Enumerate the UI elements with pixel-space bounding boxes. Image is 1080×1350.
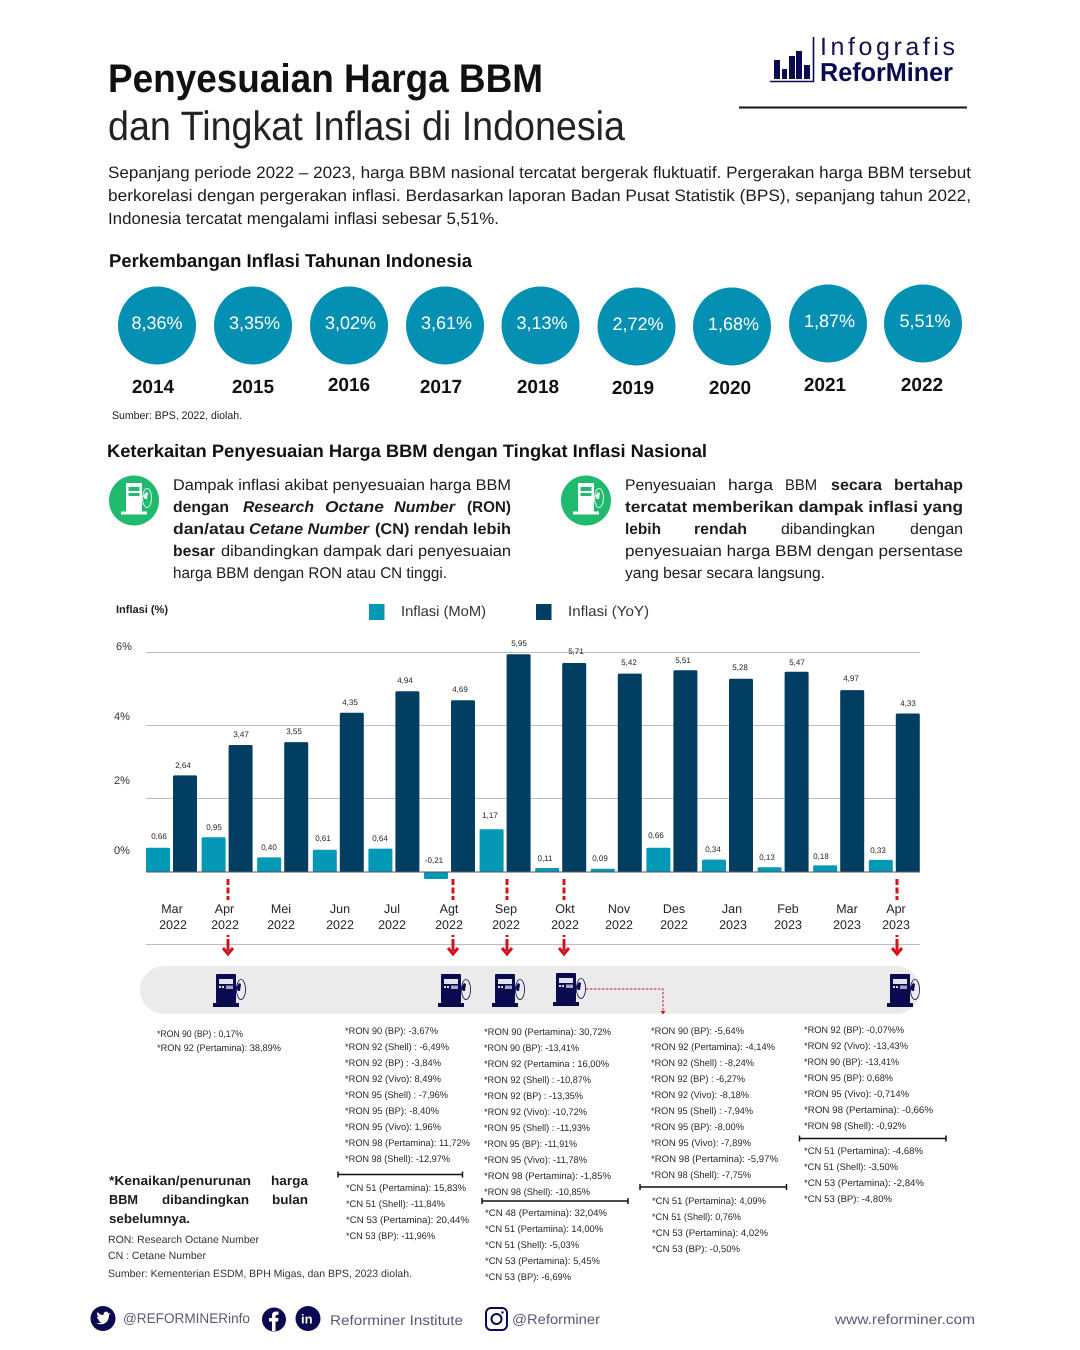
- price list: Apr 2022: [157, 1029, 282, 1054]
- price list: Okt 2022: *CN 51 (Shell): 0,76%: [652, 1212, 742, 1223]
- footnote: price change note: *Kenaikan/penurunan: [109, 1173, 251, 1188]
- value labels: 0,33: [870, 846, 886, 855]
- footer: facebook: [262, 1308, 286, 1332]
- y axis labels: 0%: [114, 845, 130, 857]
- text block: left explanation: besar: [173, 543, 215, 560]
- price list: Apr 2023: *RON 98 (Pertamina): -0,66%: [804, 1105, 934, 1116]
- value labels: 3,47: [233, 730, 249, 739]
- price list: Sep 2022: *RON 98 (Shell): -10,85%: [484, 1187, 591, 1198]
- logo: Infografis ReforMiner: ReforMiner: [820, 57, 953, 87]
- month labels: 2022: [660, 918, 688, 932]
- red arrows from chart to fuel pumps: [223, 879, 902, 954]
- price list: Apr 2023: *CN 53 (BP): -4,80%: [804, 1194, 893, 1205]
- text block: left explanation: [173, 477, 511, 582]
- logo: Infografis ReforMiner: [770, 33, 955, 87]
- text block: left explanation: dibandingkan dampak dari penyesuaian: [221, 543, 511, 560]
- value labels: 0,61: [315, 834, 331, 843]
- legend: Inflasi (YoY): [568, 604, 649, 620]
- price list: Agt 2022: *CN 51 (Shell): -11,84%: [346, 1199, 446, 1210]
- price list: Sep 2022: *RON 90 (Pertamina): 30,72%: [484, 1027, 612, 1038]
- price list: Agt 2022: *RON 92 (Shell) : -6,49%: [345, 1042, 450, 1053]
- price list: Okt 2022: *CN 53 (BP): -0,50%: [652, 1244, 741, 1255]
- price list: Sep 2022: *CN 48 (Pertamina): 32,04%: [485, 1208, 608, 1219]
- price list: Okt 2022: *RON 92 (Shell) : -8,24%: [651, 1058, 755, 1069]
- year labels: 2014: [132, 377, 175, 398]
- footer: linkedin: [296, 1306, 463, 1331]
- footer: linkedin: in: [301, 1312, 313, 1326]
- icon: green fuel pump left: [109, 476, 159, 526]
- MoM bars: [146, 829, 893, 879]
- value labels: 0,64: [372, 834, 388, 843]
- month labels: 2023: [882, 918, 910, 932]
- month labels: 2022: [326, 918, 354, 932]
- text block: left explanation: Number: [394, 499, 456, 516]
- month labels: Okt: [555, 902, 575, 916]
- month labels: Jul: [384, 902, 400, 916]
- text block: right explanation: bertahap: [894, 477, 963, 494]
- value labels: 4,97: [843, 674, 859, 683]
- month labels: [159, 902, 910, 932]
- footnote: price change note: sebelumnya.: [109, 1211, 190, 1226]
- month labels: 2022: [492, 918, 520, 932]
- value labels: 0,18: [813, 852, 829, 861]
- title: [108, 57, 625, 149]
- value labels: 0,11: [538, 854, 553, 863]
- month labels: Mei: [271, 902, 291, 916]
- price list: Apr 2022: *RON 92 (Pertamina): 38,89%: [157, 1043, 282, 1054]
- text block: left explanation: Research: [243, 499, 314, 516]
- glossary and source: [108, 1234, 412, 1280]
- price list: Sep 2022: *RON 90 (BP): -13,41%: [484, 1043, 580, 1054]
- price list: Okt 2022: *RON 92 (Pertamina): -4,14%: [651, 1042, 776, 1053]
- price list: Sep 2022: *RON 95 (Vivo): -11,78%: [484, 1155, 588, 1166]
- price list: Apr 2023: *RON 95 (Vivo): -0,714%: [804, 1089, 910, 1100]
- text block: right explanation: secara: [831, 477, 882, 494]
- price list: Agt 2022: *RON 95 (BP): -8,40%: [345, 1106, 440, 1117]
- year labels: 2016: [328, 375, 370, 396]
- text block: left explanation: dengan: [173, 499, 229, 516]
- footer: twitter: [90, 1306, 250, 1331]
- value labels: 0,13: [759, 853, 775, 862]
- footnote: price change note: [109, 1173, 309, 1226]
- dotted connector arrow: [586, 989, 666, 1014]
- month labels: Feb: [777, 902, 799, 916]
- value labels: 4,69: [452, 685, 468, 694]
- text block: right explanation: [625, 477, 963, 582]
- annual inflation circles: 3,02%: [325, 313, 376, 333]
- footer: instagram: @Reforminer: [512, 1311, 600, 1327]
- title: Penyesuaian Harga BBM: [108, 57, 543, 101]
- year labels: 2020: [709, 378, 751, 399]
- month labels: Agt: [440, 902, 459, 916]
- chart axis title: Inflasi (%): [116, 604, 168, 616]
- price list: Apr 2023: *RON 92 (BP): -0,07%%: [804, 1025, 905, 1036]
- price list: Okt 2022: *RON 92 (Vivo): -8,18%: [651, 1090, 750, 1101]
- price list: Agt 2022: *RON 92 (Vivo): 8,49%: [345, 1074, 442, 1085]
- price list: Agt 2022: *CN 53 (BP): -11,96%: [346, 1231, 436, 1242]
- price list: Sep 2022: *RON 92 (Shell) : -10,87%: [484, 1075, 592, 1086]
- price list: Agt 2022: *RON 98 (Pertamina): 11,72%: [345, 1138, 471, 1149]
- price list: Apr 2023: *CN 51 (Shell): -3,50%: [804, 1162, 899, 1173]
- price list: Apr 2023: *RON 92 (Vivo): -13,43%: [804, 1041, 909, 1052]
- value labels: 1,17: [482, 811, 498, 820]
- price list: Apr 2023: *CN 51 (Pertamina): -4,68%: [804, 1146, 924, 1157]
- year labels: 2017: [420, 377, 462, 398]
- value labels: 0,09: [592, 854, 608, 863]
- price list: Apr 2023: *RON 95 (BP): 0,68%: [804, 1073, 894, 1084]
- value labels: 0,66: [648, 831, 664, 840]
- price list: Sep 2022: [482, 1027, 628, 1283]
- text block: left explanation: Cetane Number: [249, 521, 370, 538]
- price list: Sep 2022: *RON 95 (Shell) : -11,93%: [484, 1123, 591, 1134]
- text block: left explanation: (CN) rendah lebih: [375, 521, 511, 538]
- value labels: 4,35: [342, 698, 358, 707]
- price list: Agt 2022: *RON 90 (BP): -3,67%: [345, 1026, 439, 1037]
- footnote: price change note: harga: [271, 1173, 309, 1188]
- month labels: Apr: [886, 902, 906, 916]
- price list: Okt 2022: *CN 51 (Pertamina): 4,09%: [652, 1196, 767, 1207]
- text block: left explanation: (RON): [467, 499, 511, 516]
- glossary and source: RON: Research Octane Number: [108, 1234, 259, 1246]
- y axis labels: 4%: [114, 711, 130, 723]
- year labels: 2018: [517, 377, 559, 398]
- price list: Agt 2022: *RON 95 (Shell) : -7,96%: [345, 1090, 449, 1101]
- year labels: [132, 375, 943, 399]
- price list: Agt 2022: [338, 1026, 471, 1242]
- footer: website: www.reforminer.com: [834, 1311, 975, 1327]
- price list: Okt 2022: *RON 95 (Shell) : -7,94%: [651, 1106, 754, 1117]
- text block: right explanation: lebih: [625, 521, 661, 538]
- intro paragraph: berkorelasi dengan pergerakan inflasi. Berdasarkan laporan Badan Pusat Statistik (BPS), sepanjang tahun 2022,: [108, 187, 971, 205]
- annual inflation circles: 2,72%: [612, 314, 664, 334]
- value labels: 0,95: [206, 823, 222, 832]
- month labels: 2022: [211, 918, 239, 932]
- value labels: 3,55: [286, 727, 302, 736]
- month labels: 2022: [435, 918, 463, 932]
- text block: left explanation: Dampak inflasi akibat penyesuaian harga BBM: [173, 477, 511, 494]
- text block: left explanation: dan/atau: [173, 521, 245, 538]
- month labels: 2022: [378, 918, 406, 932]
- year labels: 2019: [612, 378, 654, 399]
- footnote: price change note: bulan: [272, 1192, 308, 1207]
- value labels: 5,47: [789, 658, 805, 667]
- annual inflation circles: 3,13%: [516, 313, 568, 333]
- annual inflation circles: 8,36%: [131, 313, 183, 333]
- heading: relationship: Keterkaitan Penyesuaian Harga BBM dengan Tingkat Inflasi Nasional: [107, 441, 707, 461]
- price list: Sep 2022: *RON 92 (Pertamina : 16,00%: [484, 1059, 610, 1070]
- intro paragraph: Sepanjang periode 2022 – 2023, harga BBM nasional tercatat bergerak fluktuatif. Pergerakan harga BBM tersebut: [108, 164, 971, 182]
- icon: green fuel pump right: [561, 476, 611, 526]
- intro paragraph: [108, 164, 971, 228]
- timeline band: [140, 966, 920, 1014]
- price list: Sep 2022: *CN 51 (Shell): -5,03%: [485, 1240, 580, 1251]
- footer: instagram: [486, 1308, 600, 1330]
- value labels: 2,64: [175, 761, 191, 770]
- footer: linkedin: Reforminer Institute: [330, 1312, 463, 1328]
- month labels: 2023: [833, 918, 861, 932]
- price list: Okt 2022: *RON 95 (BP): -8,00%: [651, 1122, 745, 1133]
- value labels: 5,71: [568, 647, 584, 656]
- legend: [369, 604, 649, 620]
- price list: Okt 2022: *RON 92 (BP) : -6,27%: [651, 1074, 746, 1085]
- price list: Agt 2022: *RON 92 (BP) : -3,84%: [345, 1058, 442, 1069]
- price list: Okt 2022: *CN 53 (Pertamina): 4,02%: [652, 1228, 769, 1239]
- glossary and source: Sumber: Kementerian ESDM, BPH Migas, dan BPS, 2023 diolah.: [108, 1268, 412, 1280]
- bar chart: inflation MoM and YoY: [114, 639, 920, 879]
- text block: left explanation: Octane: [325, 499, 384, 516]
- month labels: 2022: [551, 918, 579, 932]
- price list: Sep 2022: *CN 53 (Pertamina): 5,45%: [485, 1256, 601, 1267]
- price list: Okt 2022: *RON 90 (BP): -5,64%: [651, 1026, 745, 1037]
- annual inflation circles: 3,61%: [421, 313, 472, 333]
- price list: Agt 2022: *CN 53 (Pertamina): 20,44%: [346, 1215, 470, 1226]
- text block: right explanation: rendah: [694, 521, 747, 538]
- month labels: 2023: [774, 918, 802, 932]
- y axis labels: [114, 641, 132, 857]
- value labels: 5,28: [732, 663, 748, 672]
- price list: Sep 2022: *RON 95 (BP): -11,91%: [484, 1139, 578, 1150]
- price list: Apr 2023: *RON 90 (BP): -13,41%: [804, 1057, 900, 1068]
- value labels: 5,51: [675, 656, 691, 665]
- footer: twitter: @REFORMINERinfo: [123, 1310, 250, 1326]
- month labels: Mar: [836, 902, 858, 916]
- month labels: Nov: [608, 902, 631, 916]
- price list: Sep 2022: *RON 92 (Vivo): -10,72%: [484, 1107, 588, 1118]
- source note: BPS: Sumber: BPS, 2022, diolah.: [112, 410, 242, 422]
- price list: Apr 2023: [800, 1025, 946, 1205]
- month labels: Mar: [161, 902, 183, 916]
- footnote: price change note: dibandingkan: [162, 1192, 249, 1207]
- value labels: 5,95: [511, 639, 527, 648]
- price list: Okt 2022: *RON 98 (Shell): -7,75%: [651, 1170, 752, 1181]
- price list: Apr 2022: *RON 90 (BP) : 0,17%: [157, 1029, 243, 1040]
- value labels: 0,40: [261, 843, 277, 852]
- year labels: 2015: [232, 377, 275, 398]
- text block: right explanation: tercatat memberikan dampak inflasi yang: [625, 499, 963, 516]
- y axis labels: 6%: [116, 641, 132, 653]
- glossary and source: CN : Cetane Number: [108, 1250, 206, 1262]
- price list: Sep 2022: *CN 51 (Pertamina): 14,00%: [485, 1224, 604, 1235]
- price list: Okt 2022: *RON 95 (Vivo): -7,89%: [651, 1138, 752, 1149]
- text block: right explanation: harga: [728, 477, 773, 494]
- annual inflation circles: 1,87%: [804, 311, 855, 331]
- price list: Agt 2022: *RON 95 (Vivo): 1,96%: [345, 1122, 442, 1133]
- month labels: 2022: [267, 918, 295, 932]
- price list: Apr 2023: *RON 98 (Shell): -0,92%: [804, 1121, 907, 1132]
- price list: Okt 2022: *RON 98 (Pertamina): -5,97%: [651, 1154, 779, 1165]
- YoY bars: [173, 654, 920, 872]
- icons: fuel pumps on timeline: [213, 973, 920, 1007]
- month labels: Sep: [495, 902, 517, 916]
- text block: right explanation: dibandingkan: [781, 521, 875, 538]
- value labels: -0,21: [425, 856, 444, 865]
- value labels: 5,42: [621, 658, 637, 667]
- value labels: 4,33: [900, 699, 916, 708]
- month labels: 2022: [159, 918, 187, 932]
- annual inflation circles: 1,68%: [708, 314, 759, 334]
- value labels: 0,34: [705, 845, 721, 854]
- year labels: 2022: [901, 375, 943, 396]
- value labels: 4,94: [397, 676, 413, 685]
- price list: Agt 2022: *CN 51 (Pertamina): 15,83%: [346, 1183, 467, 1194]
- value labels: 0,66: [151, 832, 167, 841]
- month labels: Apr: [215, 902, 234, 916]
- month labels: 2023: [719, 918, 747, 932]
- text block: right explanation: yang besar secara langsung.: [625, 565, 825, 582]
- value labels: [151, 639, 916, 865]
- text block: right explanation: penyesuaian harga BBM dengan persentase: [625, 543, 963, 560]
- text block: left explanation: harga BBM dengan RON atau CN tinggi.: [173, 565, 447, 582]
- month labels: Des: [663, 902, 685, 916]
- annual inflation circles: 3,35%: [229, 313, 280, 333]
- logo: Infografis ReforMiner: Infografis: [820, 33, 955, 61]
- annual inflation circles: 5,51%: [899, 311, 951, 331]
- price list: Sep 2022: *RON 92 (BP) : -13,35%: [484, 1091, 584, 1102]
- price list: Okt 2022: [640, 1026, 786, 1255]
- price list: Apr 2023: *CN 53 (Pertamina): -2,84%: [804, 1178, 925, 1189]
- month labels: Jun: [330, 902, 350, 916]
- price list: Agt 2022: *RON 98 (Shell): -12,97%: [345, 1154, 451, 1165]
- year labels: 2021: [804, 375, 847, 396]
- footnote: price change note: BBM: [109, 1192, 138, 1207]
- price list: Sep 2022: *RON 98 (Pertamina): -1,85%: [484, 1171, 612, 1182]
- month labels: 2022: [605, 918, 633, 932]
- month labels: Jan: [722, 902, 742, 916]
- text block: right explanation: dengan: [910, 521, 963, 538]
- price list: Sep 2022: *CN 53 (BP): -6,69%: [485, 1272, 572, 1283]
- annual inflation circles: [118, 284, 962, 366]
- intro paragraph: Indonesia tercatat mengalami inflasi sebesar 5,51%.: [108, 210, 499, 228]
- heading: annual inflation: Perkembangan Inflasi Tahunan Indonesia: [109, 250, 473, 271]
- text block: right explanation: Penyesuaian: [625, 477, 716, 494]
- title: dan Tingkat Inflasi di Indonesia: [108, 103, 625, 149]
- y axis labels: 2%: [114, 775, 130, 787]
- legend: Inflasi (MoM): [401, 604, 486, 620]
- text block: right explanation: BBM: [785, 477, 817, 494]
